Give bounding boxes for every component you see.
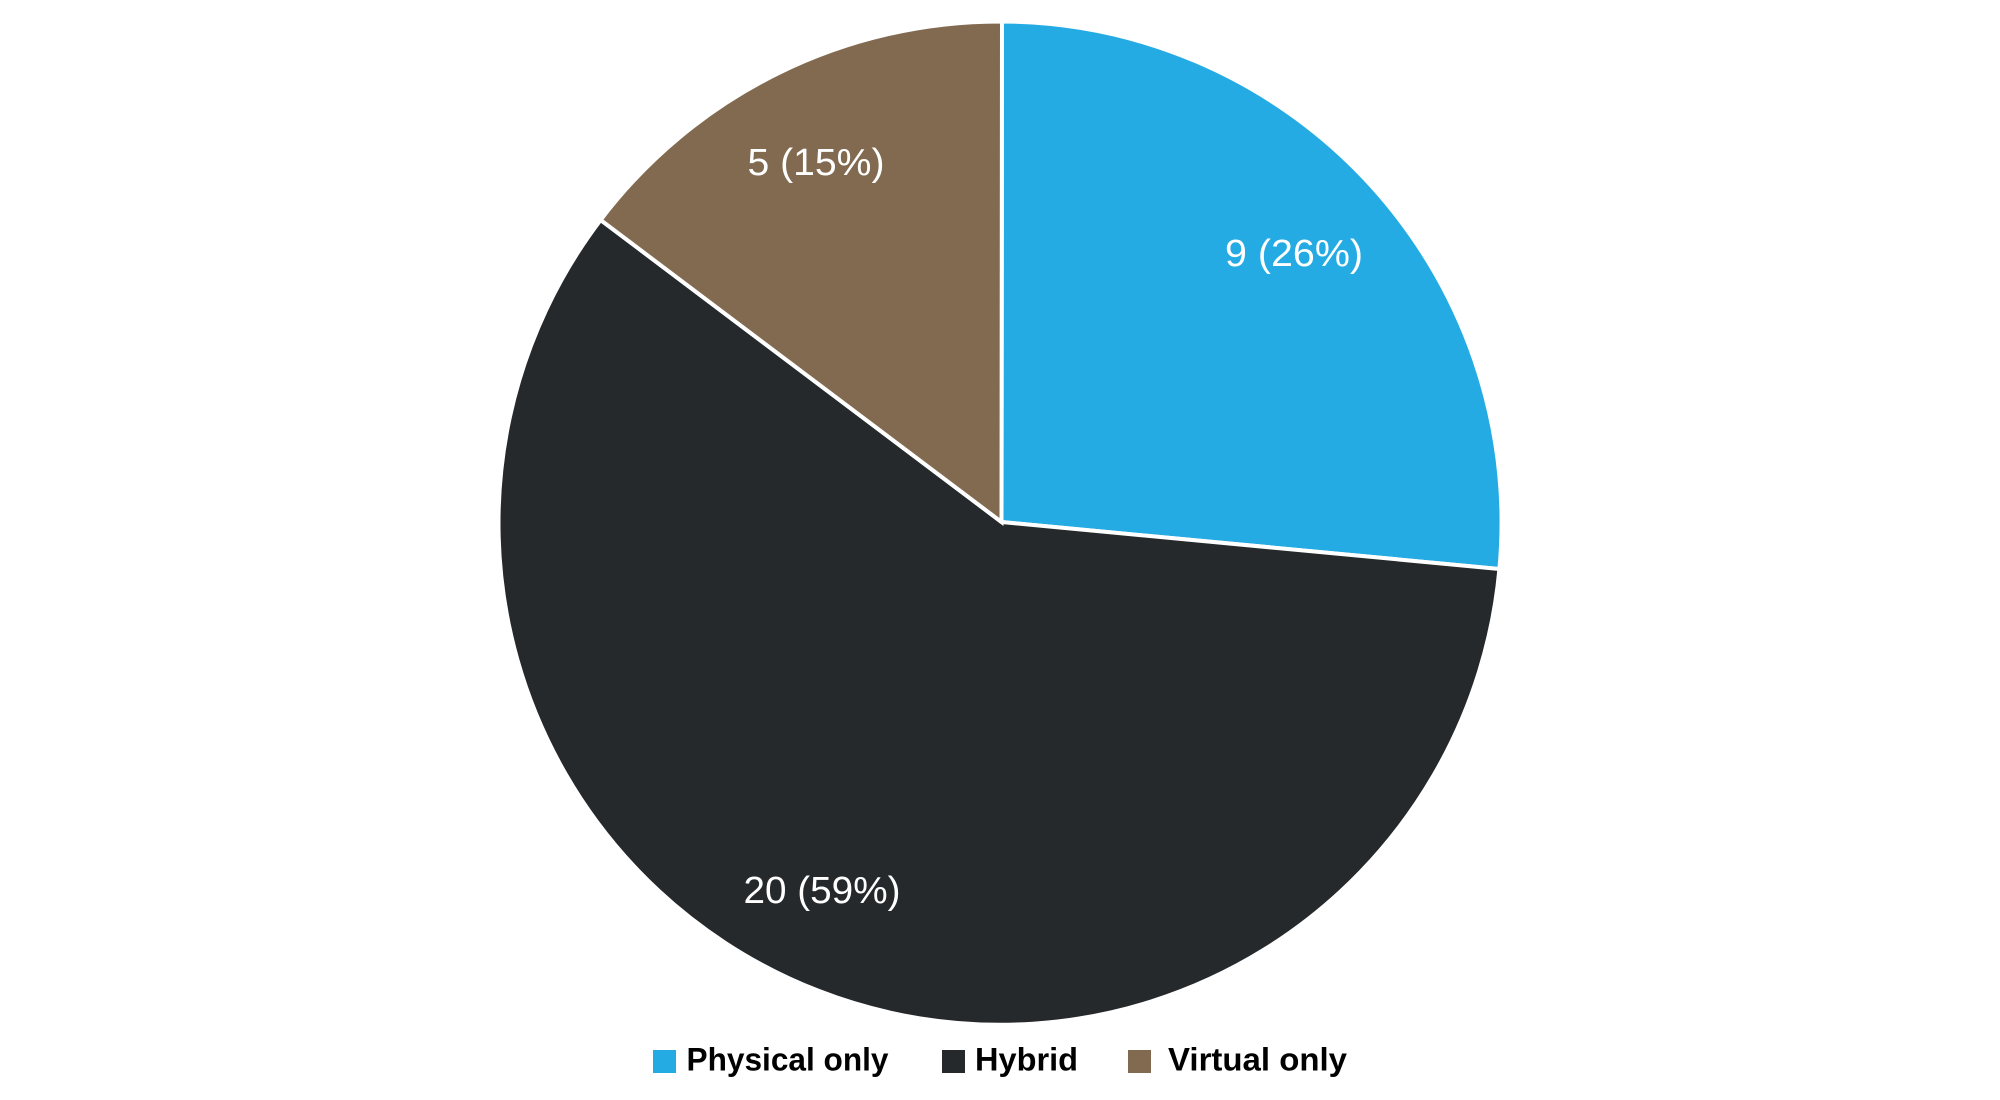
pie slices: [498, 21, 1502, 1025]
value label: Physical only: 9 (26%): [1225, 233, 1363, 275]
value label: Virtual only: 5 (15%): [748, 142, 884, 184]
legend item: Virtual only: Virtual only: [1168, 1042, 1347, 1078]
slice: Physical only: [1002, 22, 1502, 569]
legend item: Hybrid: Hybrid: [975, 1042, 1078, 1078]
value label: Hybrid: 20 (59%): [744, 870, 900, 912]
legend item: Physical only: Physical only: [686, 1042, 889, 1078]
legend: [653, 1042, 1347, 1078]
slice: Virtual only: [601, 21, 1002, 522]
slice: Hybrid: [498, 220, 1499, 1025]
